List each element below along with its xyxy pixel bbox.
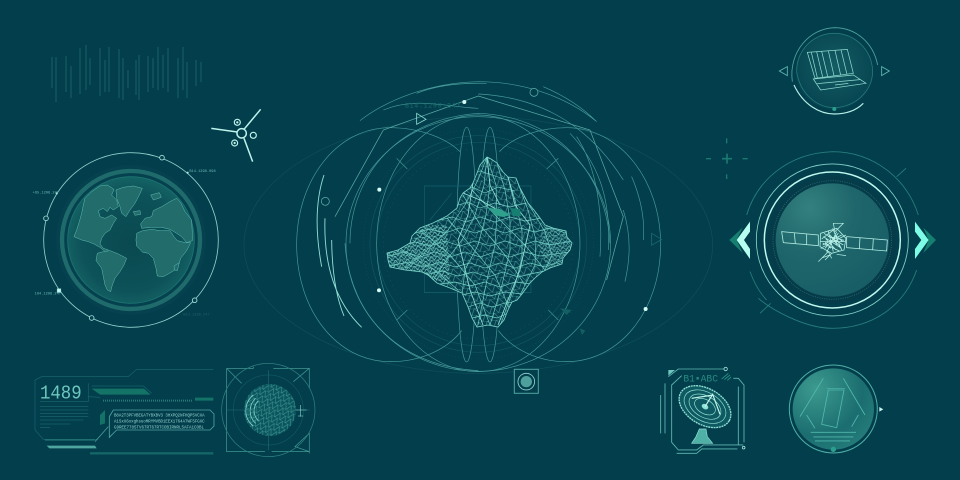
square target button bbox=[514, 369, 538, 393]
left bright arcs bbox=[317, 175, 362, 327]
icon: node tri-spoke bbox=[211, 109, 261, 162]
faint square bbox=[424, 186, 531, 293]
panel frame bbox=[661, 369, 744, 453]
mesh fan lines bbox=[400, 157, 552, 326]
dish pedestal bbox=[692, 429, 713, 443]
radar dome panel bbox=[222, 363, 315, 457]
mesh rows bbox=[388, 171, 572, 318]
wireframe mountain bbox=[386, 156, 572, 328]
green facets bbox=[488, 208, 511, 217]
satellite bbox=[782, 223, 887, 262]
number: 1489 bbox=[40, 383, 82, 405]
code text bbox=[114, 415, 205, 430]
ridges bbox=[458, 157, 530, 325]
panel outline bbox=[35, 369, 213, 439]
code text: G9REE7785TV67RT67RTCOBIRNRL5AFA1COBL bbox=[114, 426, 204, 430]
coordinate labels bbox=[33, 170, 216, 317]
continents bbox=[74, 185, 192, 292]
tick marks bbox=[397, 158, 558, 320]
mesh bbox=[387, 157, 572, 327]
top arcs bbox=[360, 82, 623, 180]
crosshair bbox=[706, 138, 748, 179]
signal bars bbox=[52, 45, 201, 102]
triangle markers bbox=[417, 113, 426, 124]
data panel bottom-left bbox=[35, 369, 214, 453]
coordinate labels: 104.1298.247 bbox=[35, 292, 61, 296]
coordinate labels: +65.1298.247 bbox=[33, 191, 59, 195]
dotted rule bbox=[103, 398, 193, 404]
coordinate labels: B14.1298.098 bbox=[189, 170, 216, 174]
faint blobs bbox=[560, 308, 585, 335]
outer ellipse bbox=[244, 117, 713, 373]
green bars bbox=[92, 389, 151, 395]
right arcs bbox=[570, 133, 644, 282]
lobes bbox=[297, 113, 661, 372]
nodes bbox=[377, 100, 648, 311]
code text: B8A2T3PFVBEGATYBXBV3 3HXPQ2NFHQP5VCXA bbox=[114, 415, 205, 419]
globe panel bbox=[33, 153, 218, 327]
ring markers bbox=[44, 155, 197, 320]
central orbit system bbox=[244, 82, 713, 373]
satellite widget bbox=[729, 152, 936, 328]
laptop widget bbox=[779, 28, 889, 114]
bottom bars bbox=[45, 438, 95, 441]
code text: A1SxX6oxghsuoMRYMVBD1EEX1764A7WF5FGXC bbox=[114, 420, 205, 425]
code text box bbox=[109, 410, 214, 437]
coordinate labels: B14.1298.247 bbox=[183, 313, 210, 317]
laptop bbox=[807, 49, 866, 90]
small rings bbox=[530, 88, 538, 96]
striped lines bbox=[40, 407, 88, 428]
dish bbox=[672, 377, 738, 436]
chevrons bbox=[729, 228, 743, 253]
coordinate label: B14.1298.247 bbox=[405, 101, 461, 109]
label: B1▪ABC bbox=[683, 373, 718, 384]
hexagon frame bbox=[335, 96, 623, 280]
phone sphere bbox=[789, 365, 883, 453]
dish panel bbox=[661, 367, 745, 453]
